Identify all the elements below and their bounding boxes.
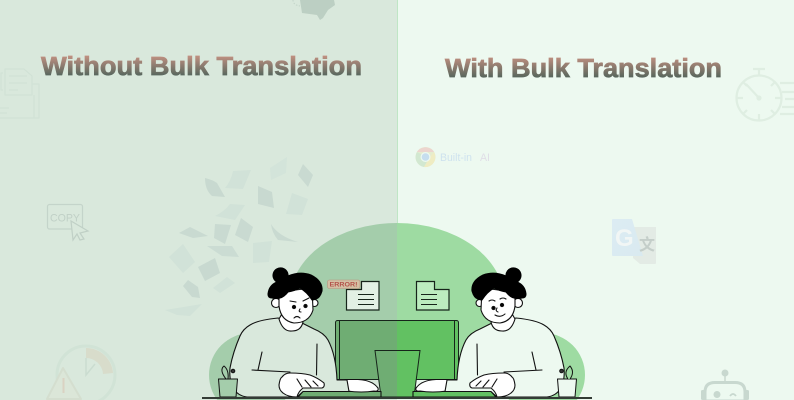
smile: [495, 314, 505, 316]
icon: copy button with cursor: COPY: [50, 212, 81, 224]
left panel background: [0, 0, 397, 400]
sweater: [230, 318, 349, 397]
icon: google translate: 文: [639, 235, 655, 254]
near hand: [279, 373, 324, 397]
panel: without bulk translation: [0, 0, 397, 400]
icon: chrome built-in AI: Built-in: [440, 152, 472, 164]
icon: stopwatch: [736, 69, 794, 121]
monitor: left half: [335, 320, 397, 397]
desk line: [202, 397, 592, 399]
ear: [272, 298, 280, 308]
error label: ERROR!: [330, 282, 358, 289]
far hand: [416, 380, 449, 392]
icon: document stack: [0, 69, 39, 118]
icon: clock with warning triangle: [47, 346, 115, 400]
hair: [268, 268, 322, 300]
panel: with bulk translation: [397, 0, 794, 400]
happy eyes and brows: [489, 298, 506, 312]
keyboard: [298, 392, 381, 397]
icon: robot: [701, 370, 749, 400]
icon: megaphone: [293, 0, 335, 20]
sweater: [445, 318, 564, 397]
heading: without bulk translation: Without Bulk Translation: [41, 53, 362, 81]
near hand: [470, 373, 515, 397]
sleeve creases: [477, 344, 542, 375]
finger lines: [297, 379, 318, 387]
divider: [397, 0, 398, 223]
person: happy, with bulk translation: [413, 268, 564, 397]
neck and collar: [279, 312, 303, 331]
icon: chrome built-in AI: [416, 147, 490, 167]
heading: with bulk translation: With Bulk Translation: [445, 55, 722, 83]
icon: copy button with cursor: [48, 204, 88, 240]
person: frustrated, without bulk translation: [230, 268, 381, 397]
plant pot: left: [218, 366, 238, 397]
document icon: right: [416, 282, 449, 310]
decorative blobs: left: [209, 223, 397, 400]
frustrated eyes and brows: [290, 298, 309, 312]
icon: google translate: [612, 219, 656, 264]
plant pot: right: [558, 366, 576, 397]
ear: [514, 298, 522, 308]
ear right: [311, 300, 318, 306]
sleeve creases: [252, 344, 317, 375]
frown: [294, 316, 300, 318]
decorative blobs: right: [397, 223, 585, 400]
keyboard: [413, 392, 496, 397]
monitor: right half: [397, 320, 459, 397]
ear right: [476, 300, 483, 306]
neck and collar: [491, 312, 515, 331]
face: [481, 288, 515, 323]
far hand: [345, 380, 378, 392]
icon: chrome built-in AI: AI: [480, 152, 490, 164]
right panel background: [397, 0, 794, 400]
document with error label: [328, 280, 379, 310]
finger lines: [476, 379, 497, 387]
hair: [472, 268, 526, 300]
icon: google translate: G: [615, 225, 634, 252]
face: [279, 288, 313, 323]
scattered papers: [165, 157, 313, 316]
document icon: left: [346, 282, 379, 310]
